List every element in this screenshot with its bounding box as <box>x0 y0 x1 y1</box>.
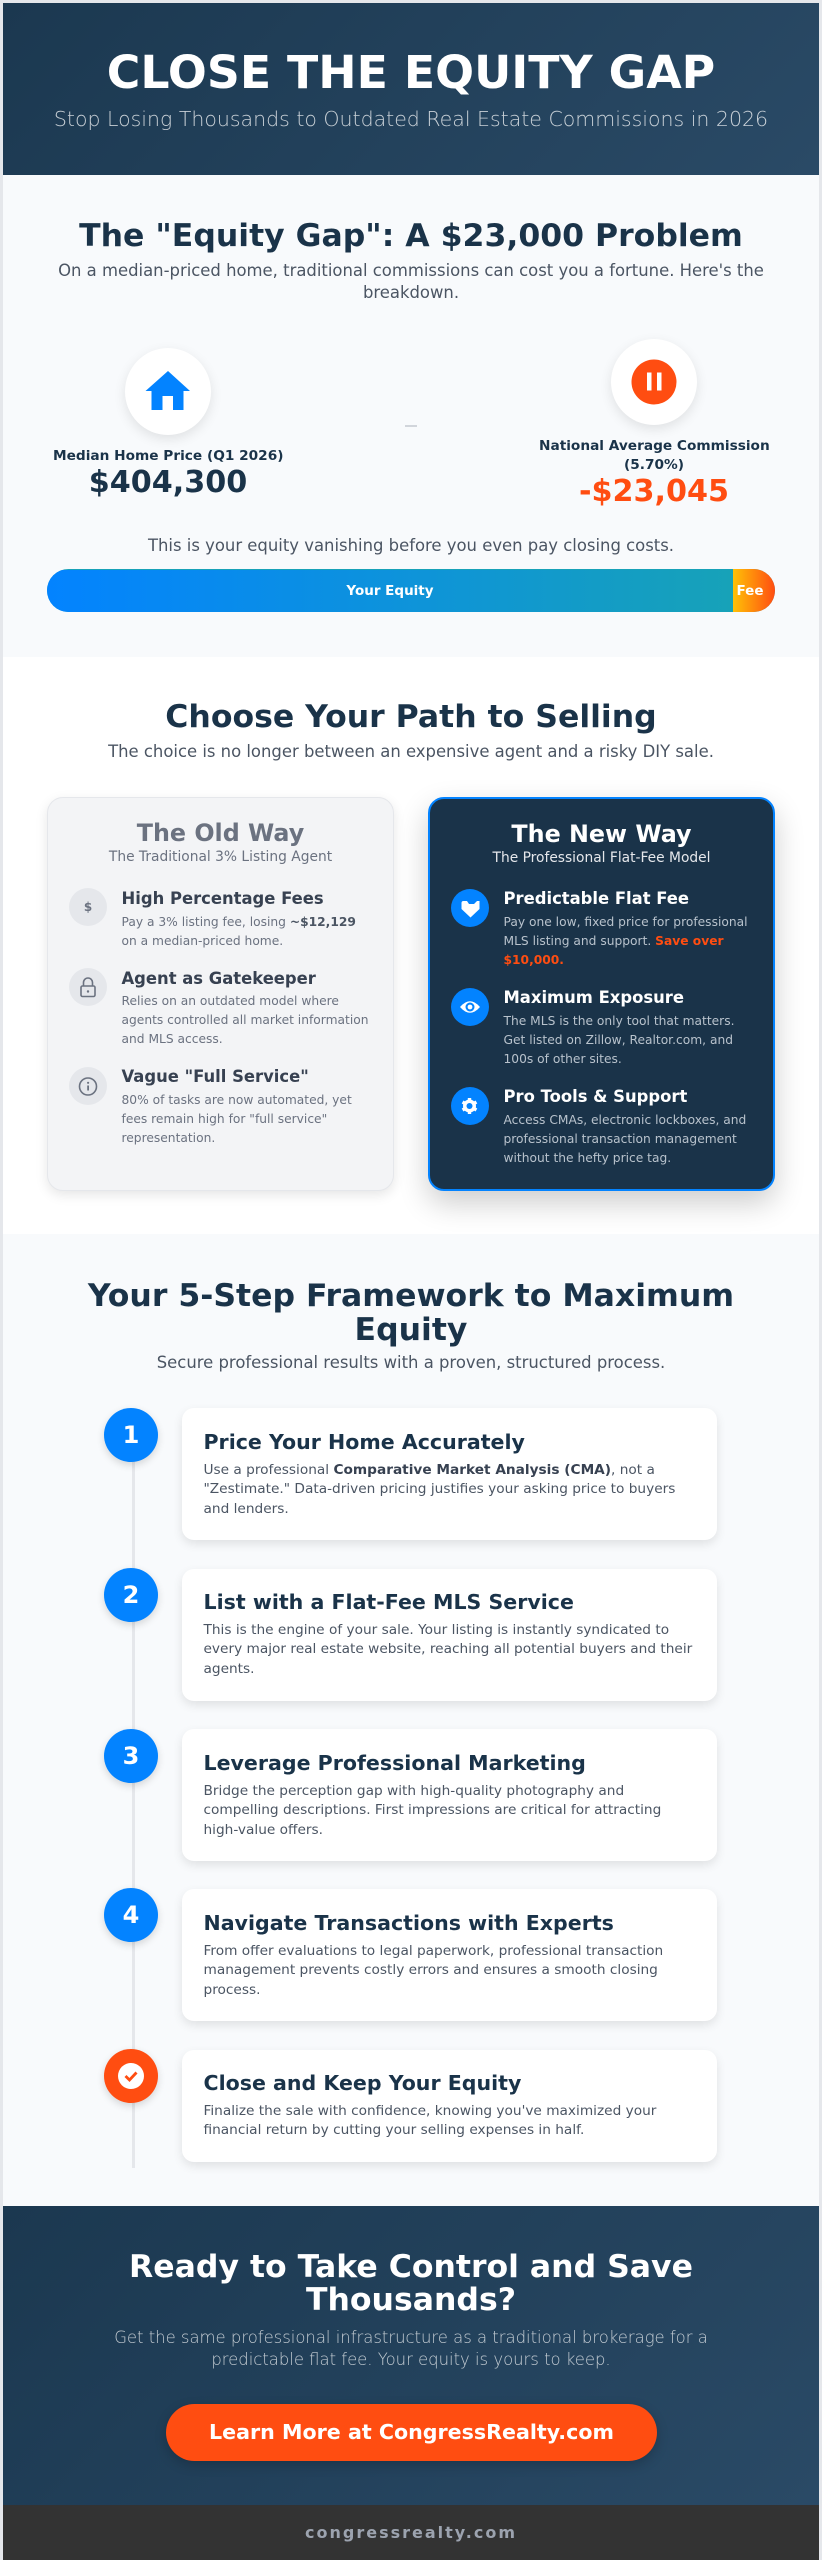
item text <box>503 1014 734 1066</box>
step 5 check badge <box>104 2049 158 2103</box>
icon: dollar: $ <box>84 900 92 914</box>
item title: Vague "Full Service" <box>122 1066 309 1086</box>
step 5 text: financial return by cutting your selling expenses in half. <box>204 2122 584 2138</box>
item: agent as gatekeeper <box>69 968 369 1046</box>
item text: 80% of tasks are now automated, yet <box>122 1092 352 1106</box>
old way subtitle: The Traditional 3% Listing Agent <box>109 848 332 864</box>
item text: Relies on an outdated model where <box>122 994 339 1008</box>
icon: lock <box>69 968 107 1006</box>
item text: Access CMAs, electronic lockboxes, and <box>504 1112 746 1126</box>
panel: 5-step framework <box>3 1234 819 2206</box>
step 2 text: This is the engine of your sale. Your listing is instantly syndicated to <box>204 1622 669 1638</box>
item text: and MLS access. <box>122 1032 223 1046</box>
item text: $10,000. <box>504 953 564 967</box>
step 1 text: Use a professional Comparative Market Analysis (CMA), not a <box>204 1462 655 1478</box>
value: home price: $404,300 <box>89 465 247 500</box>
item text: on a median-priced home. <box>122 934 283 948</box>
step 1 number <box>104 1408 158 1462</box>
heading: choose path: Choose Your Path to Selling <box>165 699 657 735</box>
bar label: fee: Fee <box>736 583 764 599</box>
step 3 text: high-value offers. <box>204 1822 323 1838</box>
item text: fees remain high for "full service" <box>122 1112 327 1126</box>
panel: the new way <box>428 796 775 1190</box>
heading: framework: Your 5-Step Framework to Maximum <box>88 1278 734 1314</box>
step 3 text: compelling descriptions. First impressions are critical for attracting <box>204 1802 661 1818</box>
step 2 text <box>203 1622 692 1677</box>
stat: median home price <box>53 371 283 500</box>
step 3 card <box>182 1729 717 1861</box>
step 4 title: Navigate Transactions with Experts <box>204 1911 614 1935</box>
item text: Get listed on Zillow, Realtor.com, and <box>504 1033 733 1047</box>
item text: 100s of other sites. <box>504 1052 622 1066</box>
step 5 title: Close and Keep Your Equity <box>204 2071 521 2095</box>
item text: professional transaction management <box>504 1132 737 1146</box>
icon: info <box>69 1066 107 1104</box>
item text <box>504 914 748 967</box>
panel: call to action <box>3 2206 819 2505</box>
step 2 title: List with a Flat-Fee MLS Service <box>204 1590 574 1614</box>
footer <box>3 2505 819 2560</box>
item text <box>504 1112 746 1165</box>
label: median home price: Median Home Price (Q1 2026) <box>53 448 283 464</box>
icon: eye <box>451 988 489 1026</box>
step 5 text <box>204 2103 656 2138</box>
bar segment: your equity: Your Equity <box>346 583 434 599</box>
step 1 text: "Zestimate." Data-driven pricing justifies your asking price to buyers <box>204 1481 675 1497</box>
item text <box>122 994 369 1046</box>
item: high percentage fees <box>69 888 356 948</box>
panel: the old way <box>47 796 394 1190</box>
step 3 text <box>204 1783 661 1838</box>
stat: national commission <box>539 360 770 509</box>
step 1 text <box>204 1462 675 1517</box>
step 3 number <box>104 1729 158 1783</box>
label: commission <box>539 438 770 473</box>
label: commission: (5.70%) <box>624 457 684 473</box>
step 1 title: Price Your Home Accurately <box>204 1430 525 1454</box>
cta text: Get the same professional infrastructure as a traditional brokerage for a <box>114 2328 708 2347</box>
item title: Maximum Exposure <box>504 988 684 1006</box>
timeline line <box>132 1435 134 2168</box>
title: CLOSE THE EQUITY GAP <box>107 45 715 99</box>
item title: Agent as Gatekeeper <box>122 968 316 988</box>
bar segment: your equity <box>47 570 733 612</box>
panel: equity gap problem <box>3 175 819 657</box>
intro: choose path: The choice is no longer between an expensive agent and a risky DIY sale. <box>108 742 714 761</box>
step 2 card <box>182 1569 717 1700</box>
icon: gear <box>451 1086 489 1124</box>
item: pro tools <box>451 1086 746 1165</box>
step 1 number: 1 <box>123 1421 139 1449</box>
step 5 text: Finalize the sale with confidence, knowing you've maximized your <box>204 2103 656 2119</box>
header banner <box>3 3 819 175</box>
step 2 number <box>104 1568 158 1622</box>
step 2 number: 2 <box>123 1581 139 1609</box>
footer url: congressrealty.com <box>305 2523 517 2542</box>
step 4 text: From offer evaluations to legal paperwork, professional transaction <box>204 1943 663 1959</box>
dash separator <box>405 425 417 427</box>
icon: pause badge <box>611 339 697 425</box>
step 2 text: agents. <box>204 1661 255 1677</box>
step 3 number: 3 <box>123 1742 139 1770</box>
step 4 number: 4 <box>123 1901 139 1929</box>
cta text <box>114 2328 708 2369</box>
cta button <box>166 2404 657 2461</box>
cta button: Learn More at CongressRealty.com <box>209 2420 614 2444</box>
step 4 number <box>104 1888 158 1942</box>
step 2 text: every major real estate website, reaching all potential buyers and their <box>204 1641 692 1657</box>
new way title: The New Way <box>511 820 692 848</box>
intro: framework: Secure professional results with a proven, structured process. <box>157 1353 665 1372</box>
step 1 card <box>182 1408 717 1540</box>
item text: MLS listing and support. Save over <box>504 934 724 948</box>
step 4 text: process. <box>204 1982 260 1998</box>
icon: heart tag <box>451 888 489 926</box>
caption: This is your equity vanishing before you even pay closing costs. <box>148 536 674 555</box>
item text <box>122 914 356 948</box>
label: commission: National Average Commission <box>539 438 770 454</box>
step 3 text: Bridge the perception gap with high-quality photography and <box>204 1783 624 1799</box>
item text <box>122 1092 352 1145</box>
item text: The MLS is the only tool that matters. <box>504 1014 734 1028</box>
value: commission: -$23,045 <box>579 474 729 509</box>
heading: equity gap: The "Equity Gap": A $23,000 Problem <box>79 218 743 254</box>
step 4 text: management prevents costly errors and ensures a smooth closing <box>204 1962 658 1978</box>
item title: High Percentage Fees <box>122 888 324 908</box>
heading: framework <box>88 1278 734 1348</box>
item title: Predictable Flat Fee <box>504 888 689 908</box>
step 4 card <box>182 1889 717 2021</box>
new way subtitle: The Professional Flat-Fee Model <box>493 850 710 866</box>
item text: representation. <box>122 1131 215 1145</box>
panel: choose your path <box>3 657 819 1234</box>
subtitle: Stop Losing Thousands to Outdated Real Estate Commissions in 2026 <box>54 107 768 131</box>
item: maximum exposure <box>451 988 734 1066</box>
item text: agents controlled all market information <box>122 1013 369 1027</box>
intro text: On a median-priced home, traditional commissions can cost you a fortune. Here's the <box>58 261 764 280</box>
item: predictable flat fee <box>451 888 748 967</box>
cta heading <box>129 2249 693 2318</box>
item: vague full service <box>69 1066 352 1145</box>
cta heading: Ready to Take Control and Save <box>129 2249 693 2285</box>
heading: framework: Equity <box>355 1312 467 1348</box>
item text: without the hefty price tag. <box>504 1151 671 1165</box>
item text: Pay a 3% listing fee, losing ~$12,129 <box>122 914 356 928</box>
old way title: The Old Way <box>137 818 304 846</box>
item title: Pro Tools & Support <box>504 1086 687 1106</box>
step 4 text <box>204 1943 663 1998</box>
cta text: predictable flat fee. Your equity is yours to keep. <box>211 2350 611 2369</box>
step 3 title: Leverage Professional Marketing <box>204 1751 586 1775</box>
step 1 text: and lenders. <box>204 1501 289 1517</box>
step 5 card <box>182 2050 717 2162</box>
item text: Pay one low, fixed price for professional <box>504 914 748 928</box>
equity bar <box>47 569 775 612</box>
cta heading: Thousands? <box>306 2282 516 2318</box>
intro text <box>58 261 764 302</box>
bar segment: fee <box>733 569 775 612</box>
icon: dollar <box>69 888 107 926</box>
icon: house <box>125 348 211 435</box>
intro text: breakdown. <box>363 283 459 302</box>
